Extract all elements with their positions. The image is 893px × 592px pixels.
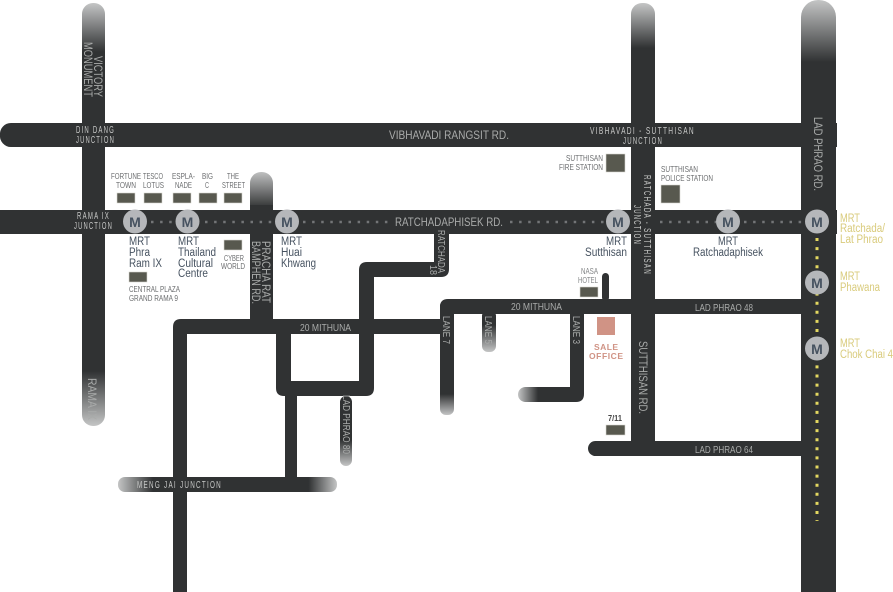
- station names: MRT: [840, 213, 860, 225]
- landmarks: BIG: [202, 171, 213, 181]
- landmarks: WORLD: [221, 261, 245, 271]
- landmarks: HOTEL: [578, 275, 598, 285]
- landmarks: LOTUS: [143, 180, 164, 190]
- road names: LAD PHRAO 80: [340, 395, 351, 454]
- station names: Cultural: [178, 258, 213, 270]
- junction labels: MENG JAI JUNCTION: [137, 480, 222, 491]
- road names: LANE 3: [570, 316, 581, 344]
- MRT stations: M: [281, 214, 293, 230]
- station names: Huai: [281, 247, 302, 259]
- yellow MRT line: [816, 238, 818, 521]
- junction labels: JUNCTION: [74, 221, 113, 232]
- MRT stations: M: [811, 341, 823, 357]
- road names: [81, 42, 825, 456]
- station names: Phawana: [840, 282, 880, 294]
- road names: 20 MITHUNA: [300, 323, 351, 334]
- landmarks: NASA: [581, 266, 598, 276]
- station names: MRT: [281, 236, 302, 248]
- road names: LAD PHRAO 64: [695, 445, 753, 456]
- landmarks: SUTTHISAN: [661, 164, 698, 174]
- road names: BAMPHEN RD.: [249, 241, 263, 304]
- MRT stations: M: [612, 214, 624, 230]
- sale office: [589, 317, 623, 361]
- MRT stations: [123, 210, 829, 360]
- station names: Khwang: [281, 258, 316, 270]
- station names: Centre: [178, 268, 208, 280]
- landmarks: FORTUNE: [111, 171, 141, 181]
- landmarks: TOWN: [116, 180, 136, 190]
- road names: LANE 5: [482, 316, 493, 344]
- junction labels: VIBHAVADI - SUTTHISAN: [590, 126, 695, 137]
- station names: MRT: [129, 236, 150, 248]
- road names: 20 MITHUNA: [511, 302, 562, 313]
- landmarks: THE: [227, 171, 239, 181]
- junction labels: JUNCTION: [631, 205, 642, 245]
- landmarks: STREET: [222, 180, 245, 190]
- road names: MONUMENT: [81, 42, 95, 98]
- junction labels: [74, 125, 695, 491]
- MRT stations: M: [722, 214, 734, 230]
- road names: RATCHADAPHISEK RD.: [395, 215, 503, 229]
- road names: RAMA IX: [85, 378, 99, 420]
- MRT stations: M: [182, 214, 193, 230]
- station names: Ratchada/: [840, 223, 886, 235]
- junction labels: JUNCTION: [76, 135, 115, 146]
- landmarks: FIRE STATION: [559, 162, 603, 172]
- junction labels: RAMA IX: [77, 211, 110, 222]
- station names: Ram IX: [129, 258, 162, 270]
- road names: LAD PHRAO RD.: [811, 117, 825, 191]
- landmarks: SUTTHISAN: [566, 153, 603, 163]
- station names: Thailand: [178, 247, 216, 259]
- road names: VICTORY: [91, 56, 105, 97]
- station names: Lat Phrao: [840, 234, 883, 246]
- MRT stations: M: [129, 214, 141, 230]
- landmarks: POLICE STATION: [661, 173, 713, 183]
- junction labels: RATCHADA - SUTTHISAN: [641, 175, 652, 275]
- road names: VIBHAVADI RANGSIT RD.: [389, 128, 509, 142]
- station names: MRT: [840, 338, 860, 350]
- landmarks: NADE: [175, 180, 192, 190]
- MRT stations: M: [811, 275, 823, 291]
- landmarks: 7/11: [608, 413, 622, 423]
- road names: LAD PHRAO 48: [695, 303, 753, 314]
- road names: 18: [427, 265, 438, 275]
- junction labels: JUNCTION: [623, 136, 663, 147]
- station names: MRT: [840, 271, 860, 283]
- station names: MRT: [718, 236, 738, 248]
- station names: Sutthisan: [585, 247, 627, 259]
- station names: [129, 213, 893, 361]
- junction labels: DIN DANG: [76, 125, 115, 136]
- road names: SUTTHISAN RD.: [636, 341, 650, 414]
- landmarks: [111, 153, 713, 435]
- station names: Phra: [129, 247, 151, 259]
- sale office: SALE: [594, 342, 618, 352]
- MRT stations: M: [811, 214, 823, 230]
- road names: PRACHA RAT: [259, 241, 273, 304]
- MRT line dots: [151, 221, 805, 223]
- station names: MRT: [178, 236, 199, 248]
- landmarks: CENTRAL PLAZA: [129, 284, 180, 294]
- station names: MRT: [606, 236, 627, 248]
- landmarks: TESCO: [143, 171, 163, 181]
- station names: Ratchadaphisek: [693, 247, 763, 259]
- landmarks: ESPLA-: [172, 171, 195, 181]
- road names: LANE 7: [440, 316, 451, 344]
- landmarks: GRAND RAMA 9: [129, 293, 178, 303]
- landmarks: CYBER: [224, 253, 244, 263]
- road names: RATCHADA: [435, 230, 446, 273]
- sale office: OFFICE: [589, 351, 623, 361]
- landmarks: C: [205, 180, 209, 190]
